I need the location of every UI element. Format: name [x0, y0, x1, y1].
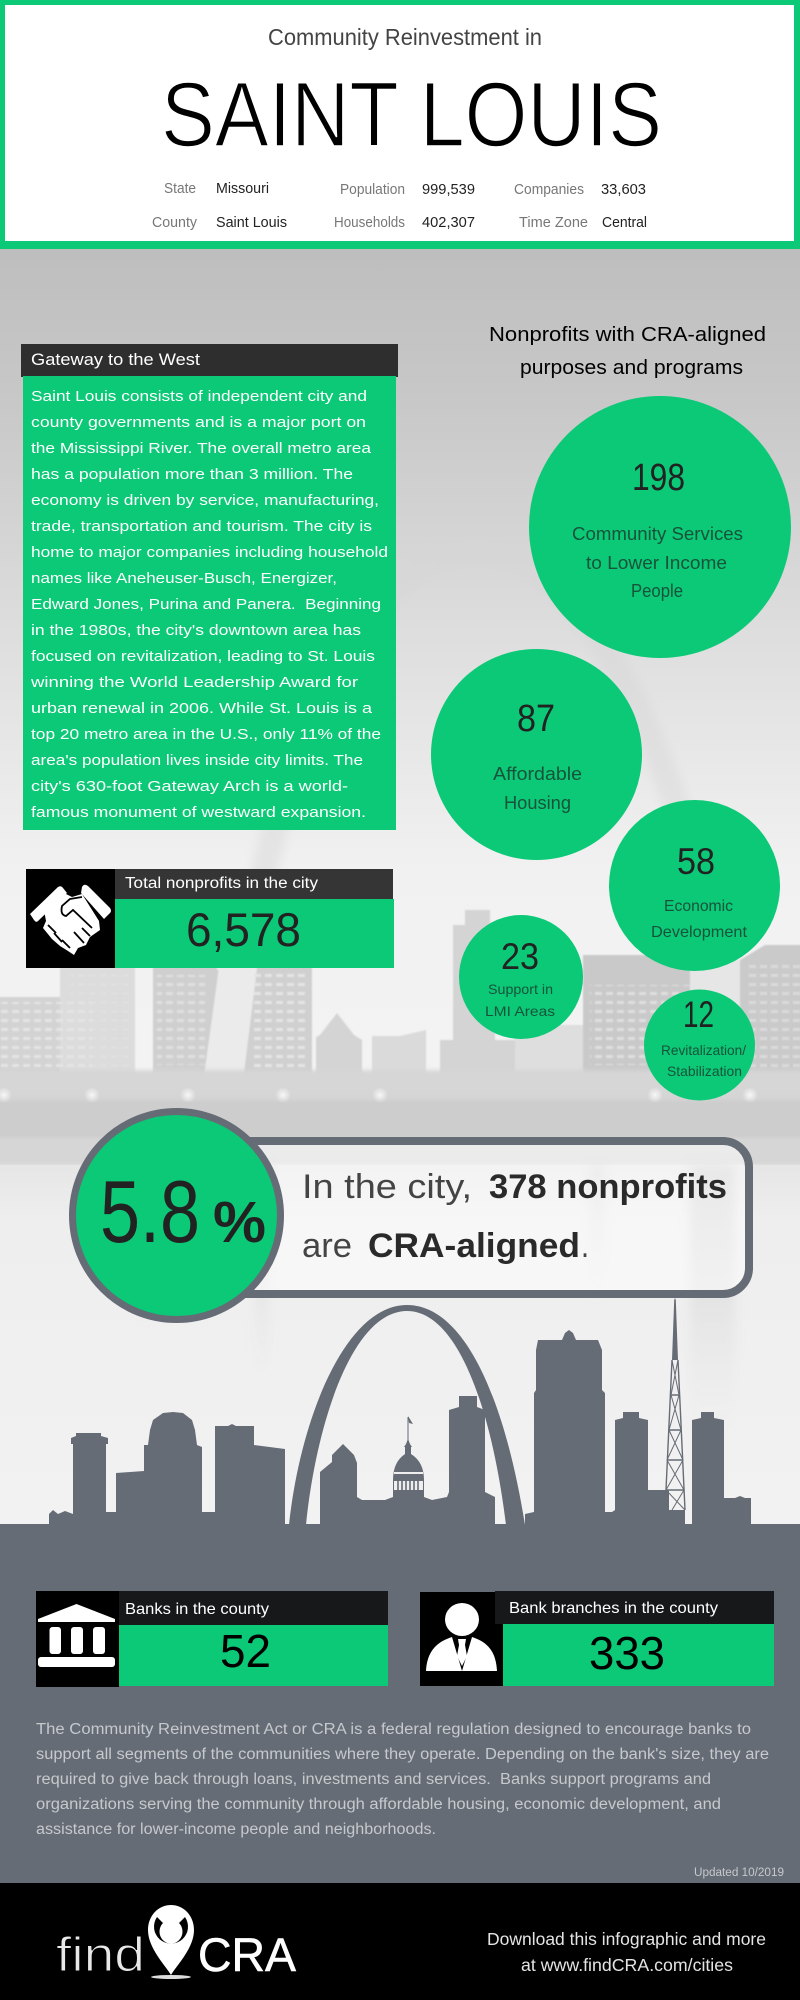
stats table: Central	[602, 215, 647, 231]
text block: about the CRA: The Community Reinvestment Act or CRA is a federal regulation designed to encourage banks to	[36, 1721, 751, 1738]
stats table: 33,603	[601, 182, 646, 198]
bubble: 87 affordable housing: 87	[517, 698, 555, 740]
panel body text: area's population lives inside city limits. The	[31, 752, 363, 769]
callout text: CRA-aligned	[368, 1227, 580, 1265]
callout text	[302, 1168, 727, 1265]
panel body text: Edward Jones, Purina and Panera. Beginning	[31, 596, 381, 613]
panel body text	[30, 388, 388, 821]
panel body text: home to major companies including household	[31, 544, 388, 561]
panel body text: famous monument of westward expansion.	[31, 804, 366, 821]
bubble: 87 affordable housing	[431, 649, 642, 860]
bubble: 23 support in LMI areas: Support in	[488, 981, 553, 997]
capitol flag	[408, 1416, 413, 1424]
panel body text: focused on revitalization, leading to St. Louis	[31, 648, 375, 665]
center buildings and capitol	[320, 1396, 495, 1525]
heading: Community Reinvestment in: Community Reinvestment in	[268, 24, 542, 50]
bubble: 23 support in LMI areas	[459, 915, 583, 1039]
bubble: 12 revitalization/stabilization	[644, 990, 755, 1100]
panel body text: top 20 metro area in the U.S., only 11% of the	[31, 726, 381, 743]
icon: Gateway Arch	[289, 1305, 525, 1525]
stats table: Missouri	[216, 181, 269, 197]
card label: Banks in the county	[125, 1601, 269, 1618]
stats table: Households	[334, 215, 405, 231]
stats table: State	[164, 181, 196, 197]
bubble: 58 economic development: Economic	[664, 898, 733, 915]
stat card: total nonprofits	[26, 869, 394, 968]
header panel	[0, 0, 800, 249]
panel body text: urban renewal in 2006. While St. Louis is a	[31, 700, 373, 717]
bubble: 198 community services: to Lower Income	[586, 553, 727, 573]
percentage circle: 5.8	[100, 1162, 200, 1261]
bubble: 23 support in LMI areas: LMI Areas	[485, 1003, 555, 1019]
panel body text: winning the World Leadership Award for	[30, 674, 358, 691]
callout: 5.8% CRA-aligned	[72, 1112, 749, 1320]
bubble: 58 economic development: Development	[651, 924, 748, 941]
panel heading: Gateway to the West	[31, 350, 200, 369]
panel body text: county governments and is a major port on	[31, 414, 366, 431]
logo: findCRA	[56, 1905, 297, 1982]
panel body text: trade, transportation and tourism. The city is	[31, 518, 372, 535]
heading: nonprofits with CRA-aligned purposes: purposes and programs	[520, 357, 743, 379]
percentage circle: %	[213, 1190, 266, 1255]
bubble: 198 community services: 198	[632, 457, 685, 499]
callout text: 378 nonprofits	[489, 1168, 727, 1206]
panel: Gateway to the West	[21, 344, 398, 830]
text block: about the CRA: support all segments of the communities where they operate. Depending on the bank's size, they are	[36, 1746, 769, 1763]
bubble: 12 revitalization/stabilization: Stabilization	[667, 1063, 742, 1079]
text block: about the CRA	[36, 1721, 769, 1838]
bubble: 87 affordable housing: Housing	[504, 793, 571, 813]
ground strip	[0, 1524, 800, 1884]
panel body text: the Mississippi River. The overall metro area	[31, 440, 372, 457]
right buildings	[525, 1330, 751, 1525]
skyline silhouette	[0, 1298, 800, 1884]
stats table	[152, 181, 647, 231]
updated date: Updated 10/2019	[694, 1867, 784, 1879]
panel body text: has a population more than 3 million. The	[31, 466, 353, 483]
card label: Bank branches in the county	[509, 1600, 718, 1617]
callout text: .	[581, 1227, 589, 1265]
capitol columns	[394, 1472, 423, 1490]
download note	[487, 1929, 766, 1975]
background photo: faded St. Louis skyline	[0, 249, 800, 1539]
logo: findCRA: find	[56, 1929, 145, 1982]
bubble: 58 economic development	[609, 800, 780, 971]
left buildings	[49, 1412, 285, 1525]
bubble: 198 community services: Community Services	[572, 524, 743, 544]
heading: nonprofits with CRA-aligned purposes: Nonprofits with CRA-aligned	[489, 324, 766, 346]
stats table: Time Zone	[519, 215, 588, 231]
stats table: 999,539	[422, 182, 475, 198]
panel body text: Saint Louis consists of independent city and	[31, 388, 367, 405]
text block: about the CRA: required to give back through loans, investments and services. Banks support programs and	[36, 1771, 711, 1788]
bubble: 198 community services	[529, 396, 791, 658]
download note: at www.findCRA.com/cities	[521, 1955, 733, 1975]
panel body text: economy is driven by service, manufacturing,	[31, 492, 379, 509]
bubble: 12 revitalization/stabilization: Revitalization/	[661, 1042, 746, 1058]
stat card: banks in the county	[36, 1591, 388, 1687]
card value: 6,578	[186, 903, 301, 956]
heading: nonprofits with CRA-aligned purposes	[489, 324, 766, 379]
panel body text: in the 1980s, the city's downtown area has	[31, 622, 361, 639]
icon: handshake	[30, 885, 111, 955]
text block: about the CRA: assistance for lower-income people and neighborhoods.	[36, 1821, 436, 1838]
callout text: In the city,	[302, 1168, 472, 1206]
logo: findCRA: CRA	[198, 1928, 297, 1981]
icon: bank building	[38, 1604, 115, 1667]
stats table: Population	[340, 182, 405, 198]
stats table: County	[152, 215, 198, 231]
panel body text: names like Aneheuser-Busch, Energizer,	[31, 570, 337, 587]
bubble: 87 affordable housing: Affordable	[493, 764, 582, 784]
title: SAINT LOUIS: SAINT LOUIS	[161, 64, 662, 166]
stats table: 402,307	[422, 215, 475, 231]
card label: Total nonprofits in the city	[125, 875, 318, 892]
icon: location pin	[148, 1905, 194, 1979]
text block: about the CRA: organizations serving the community through affordable housing, economic development, and	[36, 1796, 721, 1813]
download note: Download this infographic and more	[487, 1929, 766, 1949]
bubble: 12 revitalization/stabilization: 12	[683, 994, 714, 1035]
bubble: 58 economic development: 58	[677, 841, 715, 882]
panel body text: city's 630-foot Gateway Arch is a world-	[31, 778, 348, 795]
callout box	[180, 1141, 749, 1294]
stats table: Saint Louis	[216, 215, 287, 231]
stat card: bank branches in the county	[420, 1591, 774, 1686]
stats table: Companies	[514, 182, 584, 198]
card value: 52	[220, 1625, 271, 1677]
card value: 333	[589, 1627, 665, 1679]
bubble: 198 community services: People	[631, 581, 683, 601]
icon: person in suit	[426, 1603, 497, 1671]
icon: radio tower	[666, 1298, 685, 1510]
bubble: 23 support in LMI areas: 23	[501, 936, 539, 977]
callout text: are	[302, 1227, 352, 1265]
percentage circle	[72, 1112, 280, 1320]
footer band	[0, 1883, 800, 2000]
